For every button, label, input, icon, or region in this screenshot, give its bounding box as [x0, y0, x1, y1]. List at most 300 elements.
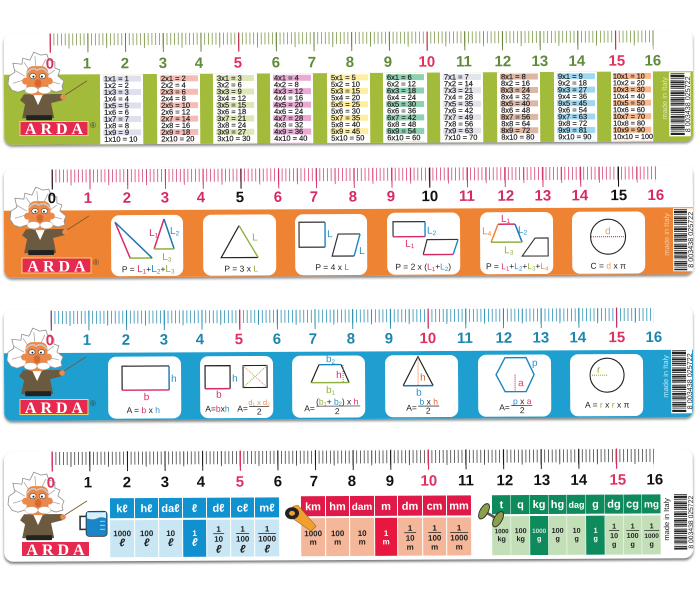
table: 3 times: 3x3 = 9 [217, 87, 242, 96]
table: 6 times: 6x8 = 48 [387, 120, 416, 129]
ruler 4 numbers [47, 471, 663, 492]
barcode [671, 349, 694, 413]
table: 8 times: 8x2 = 16 [501, 79, 530, 88]
ruler 4 numbers: 2 [123, 474, 131, 491]
table: length units: 100 [331, 529, 345, 538]
card: circle area: r [597, 365, 601, 376]
card: trapezoid area: (b [316, 397, 324, 407]
table: length units: 1 [457, 523, 462, 532]
ruler 4 numbers: 8 [348, 473, 356, 490]
ruler 1 numbers: 16 [644, 52, 661, 69]
ruler 1 numbers: 11 [456, 53, 472, 70]
card: trapezoid perimeter: + [509, 261, 514, 271]
card: equilateral triangle perimeter: P = 3 x L [224, 263, 258, 274]
card: trapezoid perimeter: L [518, 225, 524, 236]
ruler 3 numbers: 15 [608, 329, 625, 346]
ruler 3 numbers: 0 [46, 332, 54, 349]
card: rectangle and parallelogram perimeter: 1 [411, 243, 415, 250]
table: 2 times: 2x9 = 18 [161, 128, 190, 137]
table: capacity units: ℓ [168, 537, 174, 549]
card: rectangle and parallelogram perimeter: 2 [433, 230, 437, 237]
card: rectangle and parallelogram perimeter: L [405, 239, 411, 250]
card: square and rhombus area: h [232, 374, 238, 385]
table: capacity units: ℓ [264, 543, 270, 555]
ruler 1 numbers: 0 [46, 56, 54, 73]
card: square and rhombus area: b [216, 390, 222, 401]
table: length units: m [310, 538, 317, 547]
card: trapezoid perimeter: L [501, 214, 507, 225]
table: mass units: g [555, 534, 560, 543]
card: scalene triangle perimeter: L [149, 228, 155, 239]
table: 7 times: 7x8 = 56 [444, 119, 473, 129]
table: 4 times: 4x8 = 32 [274, 120, 303, 129]
card: trapezoid area: b [326, 385, 332, 396]
table: mass units: 1 [650, 521, 654, 530]
card: square and rhombus area: d₁ x d₂ [248, 398, 270, 407]
table: mass units: kg [533, 499, 545, 511]
card: scalene triangle perimeter: + [160, 264, 165, 274]
card: trapezoid area: 1 [324, 402, 327, 408]
table: 3 times [213, 73, 257, 144]
ruler 2 numbers: 13 [534, 187, 551, 205]
ruler 3 numbers: 4 [196, 331, 205, 348]
table: 10 times [611, 71, 653, 142]
ruler 1 numbers: 8 [346, 54, 354, 71]
card: triangle area [385, 355, 458, 417]
ruler 3 numbers: 8 [347, 330, 355, 348]
card: trapezoid perimeter: L [527, 261, 532, 271]
ruler 2 numbers: 12 [497, 188, 514, 205]
ruler 4 numbers: 4 [197, 474, 206, 491]
card: trapezoid perimeter: 1 [507, 218, 511, 225]
table: 8 times [497, 72, 540, 142]
card: scalene triangle perimeter: 2 [157, 268, 161, 276]
card: triangle area: b x h [419, 397, 438, 407]
made in Italy note: made in Italy [662, 498, 671, 541]
table: capacity units: hℓ [140, 503, 153, 515]
card: rectangle and parallelogram perimeter: 1 [432, 267, 436, 273]
table: 6 times: 6x3 = 18 [387, 86, 416, 95]
table: mass units: g [592, 499, 599, 511]
table: mass units: kg [516, 534, 525, 543]
card: trapezoid area: 2 [332, 360, 336, 366]
table: 7 times: 7x1 = 7 [444, 72, 469, 82]
table: mass units: dg [607, 499, 621, 511]
ruler 2 numbers: 1 [84, 190, 92, 207]
table: mass units: 10 [610, 531, 618, 540]
table: 10 times: 10x2 = 20 [613, 78, 645, 87]
table: mass units: 1000 [644, 533, 659, 540]
ruler 1 numbers: 15 [608, 53, 625, 70]
table: 9 times: 9x10 = 90 [558, 132, 591, 141]
ruler 4 numbers: 13 [533, 472, 550, 489]
table: length units: 1 [432, 524, 437, 533]
table: length units: 10 [406, 534, 415, 543]
table: 3 times: 3x10 = 30 [217, 134, 250, 143]
table: 5 times: 5x10 = 50 [331, 133, 364, 143]
table: 9 times: 9x2 = 18 [558, 78, 587, 88]
card: scalene triangle perimeter: P = L [122, 264, 143, 275]
table: 9 times: 9x7 = 63 [558, 112, 587, 121]
table: length units: m [359, 537, 366, 546]
table: 2 times: 2x3 = 6 [161, 87, 186, 96]
table: 7 times: 7x6 = 42 [444, 106, 473, 115]
ruler 1 numbers: 10 [418, 54, 435, 71]
table: capacity units: ℓ [119, 537, 125, 549]
ruler 3 numbers: 12 [495, 330, 512, 347]
table: capacity units: 1000 [258, 534, 277, 543]
table: 5 times: 5x9 = 45 [331, 127, 360, 136]
ruler 1 numbers: 6 [272, 54, 280, 71]
card: trapezoid perimeter: 3 [510, 250, 514, 257]
table: 3 times: 3x4 = 12 [217, 94, 246, 103]
table: mass units: 1 [594, 526, 598, 535]
table: 6 times: 6x7 = 42 [387, 113, 416, 122]
table: 4 times: 4x9 = 36 [274, 127, 303, 136]
card: circle circumference: C = d x π [591, 261, 626, 271]
ruler 2 numbers [48, 187, 664, 207]
ruler 3 numbers: 2 [122, 332, 130, 349]
ruler 1 numbers [46, 52, 661, 73]
card: trapezoid area: b [326, 354, 332, 365]
table: mass units: 1000 [532, 528, 547, 535]
table: 2 times: 2x10 = 20 [161, 134, 194, 143]
table: mass units: 100 [515, 526, 527, 535]
card: equilateral triangle perimeter [203, 214, 276, 276]
card: rectangle area: h [171, 374, 177, 385]
card: trapezoid perimeter: 1 [506, 267, 510, 273]
card: circle circumference [572, 211, 645, 274]
table: 9 times: 9x5 = 45 [558, 99, 587, 108]
table: 2 times: 2x2 = 4 [161, 81, 186, 90]
card: trapezoid area [292, 354, 365, 418]
table: length units: m [431, 543, 438, 552]
ruler 4 numbers: 14 [570, 472, 588, 489]
table: 7 times: 7x7 = 49 [444, 113, 473, 122]
table: 10 times: 10x7 = 70 [613, 112, 645, 121]
card: rectangle and parallelogram perimeter: 2 [445, 267, 449, 273]
table: mass units: dag [568, 500, 585, 510]
table: 5 times: 5x1 = 5 [331, 73, 356, 82]
table: capacity units: 1 [265, 524, 270, 533]
card: triangle area: b [416, 388, 422, 399]
table: length units: km [305, 501, 321, 513]
table: mass units: t [500, 499, 504, 511]
table: 2 times: 2x8 = 16 [161, 121, 190, 130]
card: triangle area: 2 [426, 406, 431, 416]
table: 6 times: 6x2 = 12 [387, 79, 416, 89]
table: 1 times: 1x4 = 4 [104, 94, 129, 103]
logo 1: ® [90, 121, 96, 130]
ruler 3 numbers: 13 [532, 329, 549, 347]
card: trapezoid perimeter: 3 [532, 267, 536, 273]
barcode [673, 208, 695, 271]
table: 1 times: 1x6 = 6 [104, 108, 129, 117]
card: triangle area: A= [406, 403, 417, 413]
table: mass units: hg [551, 499, 564, 511]
table: 1 times: 1x9 = 9 [104, 128, 129, 137]
ruler 2 numbers: 14 [571, 187, 589, 204]
table: 3 times: 3x7 = 21 [217, 114, 246, 123]
icon: dumbbell [476, 502, 506, 529]
table: 10 times: 10x10 = 100 [613, 132, 653, 141]
card: square and rhombus area [200, 356, 273, 418]
table: 3 times: 3x2 = 6 [217, 80, 242, 89]
card: trapezoid area: h [336, 370, 342, 381]
card: trapezoid perimeter: + [535, 261, 540, 271]
table: 8 times: 8x10 = 80 [501, 133, 534, 142]
table: 1 times [100, 74, 143, 144]
table: 9 times: 9x3 = 27 [558, 85, 587, 94]
table: 5 times: 5x8 = 40 [331, 120, 360, 129]
table: length units: 1 [408, 524, 413, 533]
mascot 1 [8, 52, 87, 120]
table: 9 times: 9x8 = 72 [558, 119, 587, 128]
card: scalene triangle perimeter: 2 [176, 230, 180, 237]
table: 1 times: 1x5 = 5 [104, 101, 129, 110]
table: length units: 10 [358, 529, 367, 538]
table: capacity units: ℓ [216, 544, 222, 556]
logo 3: ® [90, 399, 96, 408]
table: capacity units [110, 497, 279, 557]
card: trapezoid perimeter: 2 [519, 267, 523, 273]
ruler 4 numbers: 10 [420, 473, 437, 490]
table: 8 times: 8x9 = 72 [501, 126, 530, 135]
table: 2 times: 2x1 = 2 [161, 74, 186, 83]
ruler 4 numbers: 7 [310, 473, 318, 490]
card: trapezoid area: ) x [342, 396, 354, 407]
card: rectangle and parallelogram perimeter: L [440, 262, 445, 272]
table: capacity units: kℓ [116, 503, 128, 515]
table: 9 times: 9x6 = 54 [558, 105, 587, 115]
table: 6 times: 6x9 = 54 [387, 126, 416, 136]
ruler 3 numbers: 16 [645, 329, 662, 346]
ruler 2 numbers: 5 [236, 189, 244, 206]
table: 7 times [440, 72, 483, 143]
ruler 4 numbers: 6 [274, 473, 282, 490]
card: circle area: A = r x r x π [585, 400, 630, 410]
card: trapezoid perimeter: 4 [488, 231, 492, 238]
card: hexagon area: p [532, 358, 538, 369]
card: trapezoid perimeter: L [504, 245, 510, 256]
table: capacity units: 100 [236, 535, 250, 544]
table: 7 times: 7x3 = 21 [444, 86, 473, 95]
card: trapezoid area: + [327, 397, 334, 407]
mascot 2 [10, 187, 89, 255]
card: trapezoid perimeter: P = L [486, 261, 506, 271]
ruler 4 numbers: 9 [386, 473, 394, 490]
card: rectangle and parallelogram perimeter: L [427, 226, 433, 237]
table: 1 times: 1x3 = 3 [104, 88, 129, 97]
table: mass units: 1000 [495, 528, 509, 535]
card: scalene triangle perimeter [111, 215, 183, 276]
ruler 3 numbers: 9 [385, 330, 393, 347]
made in Italy note: made in Italy [662, 213, 671, 256]
ruler 1 numbers: 1 [83, 55, 91, 72]
table: capacity units: 1 [192, 529, 197, 538]
table: mass units: g [593, 534, 598, 543]
table: 6 times [383, 73, 427, 143]
card: rectangle area [108, 356, 181, 419]
table: mass units: 1 [612, 522, 616, 531]
table: mass units: 10 [573, 526, 581, 535]
ruler 4: unit conversion tables [4, 448, 695, 564]
ruler 1: times tables [4, 30, 693, 147]
card: square and rhombus perimeter [295, 214, 367, 275]
ruler 2: perimeter formulas [4, 165, 695, 280]
table: mass units: g [630, 540, 635, 549]
card: scalene triangle perimeter: L [165, 264, 171, 275]
table: 4 times: 4x7 = 28 [274, 114, 303, 123]
table: 3 times: 3x8 = 24 [217, 121, 246, 130]
table: 4 times: 4x10 = 40 [274, 134, 307, 143]
ruler 2 numbers: 15 [610, 187, 627, 204]
card: square and rhombus area: A= [237, 404, 248, 414]
card: trapezoid perimeter [480, 212, 553, 274]
card: circle circumference: d [605, 226, 611, 237]
table: capacity units: dℓ [212, 503, 225, 515]
card: square and rhombus perimeter: L [359, 246, 365, 257]
table: capacity units: 10 [166, 529, 176, 538]
card: scalene triangle perimeter: 3 [171, 268, 175, 275]
table: 9 times: 9x4 = 36 [558, 92, 587, 101]
table: length units: cm [427, 501, 443, 513]
table: capacity units: ℓ [192, 537, 198, 549]
table: 5 times [327, 73, 370, 143]
table: 7 times: 7x9 = 63 [444, 126, 473, 135]
table: length units: mm [449, 500, 469, 512]
table: 6 times: 6x5 = 30 [387, 100, 416, 109]
card: equilateral triangle perimeter: L [252, 232, 258, 244]
ruler 3 numbers: 6 [273, 331, 281, 348]
barcode: 8 003438 025722 [683, 76, 692, 132]
table: capacity units: 1 [216, 525, 221, 534]
table: 6 times: 6x10 = 60 [387, 133, 420, 142]
table: length units: dam [352, 502, 372, 513]
table: 5 times: 5x2 = 10 [331, 80, 360, 89]
table: 6 times: 6x6 = 36 [387, 106, 416, 115]
table: mass units: 100 [627, 531, 639, 540]
table: 7 times: 7x2 = 14 [444, 79, 473, 88]
barcode: 8 003438 025722 [688, 496, 695, 549]
ruler 1 numbers: 4 [195, 55, 204, 72]
card: trapezoid area: 2 [335, 406, 340, 416]
table: 2 times: 2x5 = 10 [161, 101, 190, 110]
card: hexagon area [478, 354, 551, 417]
table: 4 times: 4x3 = 12 [274, 87, 303, 96]
table: 1 times: 1x7 = 7 [104, 114, 129, 124]
ruler 3 numbers: 3 [160, 331, 168, 348]
table: capacity units: ℓ [240, 544, 246, 556]
card: hexagon area: p x a [513, 396, 532, 406]
card: trapezoid area: 1 [332, 391, 336, 397]
ruler 4 numbers: 16 [646, 471, 663, 488]
ruler 3 numbers [46, 329, 662, 349]
ruler 4 numbers: 15 [609, 472, 626, 489]
table: 10 times: 10x6 = 60 [613, 105, 645, 114]
card: square and rhombus area: A=bxh [205, 404, 230, 414]
card: rectangle and parallelogram perimeter: P = 2 x (L [395, 262, 432, 272]
table: 3 times: 3x1 = 3 [217, 74, 242, 83]
ruler 4 numbers: 1 [84, 474, 92, 491]
card: trapezoid perimeter: 2 [524, 230, 528, 237]
card: rectangle and parallelogram perimeter [387, 212, 460, 275]
ruler 3 numbers: 14 [569, 329, 587, 346]
mascot 4 [8, 472, 87, 540]
table: 9 times [554, 72, 597, 142]
made in Italy note: made in Italy [660, 77, 669, 120]
card: trapezoid perimeter: L [514, 261, 519, 271]
card: square and rhombus area: 2 [257, 406, 262, 416]
table: 3 times: 3x9 = 27 [217, 127, 246, 136]
ruler 1 numbers: 9 [384, 54, 392, 71]
table: 2 times: 2x7 = 14 [161, 114, 190, 123]
made in Italy note: made in Italy [661, 355, 670, 398]
ruler 3 numbers: 1 [83, 332, 91, 349]
card: trapezoid perimeter: + [522, 261, 527, 271]
ruler 4 numbers: 0 [47, 475, 55, 492]
table: 3 times: 3x5 = 15 [217, 100, 246, 110]
card: hexagon area: a [518, 378, 524, 389]
table: length units: 100 [428, 534, 442, 543]
logo 4: ARDA [26, 542, 89, 559]
table: 10 times: 10x4 = 40 [613, 92, 645, 101]
table: mass units: g [612, 540, 616, 549]
card: trapezoid perimeter: L [482, 226, 488, 237]
table: 8 times: 8x7 = 56 [501, 112, 530, 122]
table: 8 times: 8x1 = 8 [501, 72, 526, 81]
table: 10 times: 10x9 = 90 [613, 125, 645, 134]
ruler 1 numbers: 2 [121, 55, 129, 72]
table: 10 times: 10x3 = 30 [613, 85, 645, 94]
table: length units: m [407, 543, 414, 552]
card: trapezoid perimeter: 4 [545, 266, 549, 272]
table: 10 times: 10x5 = 50 [613, 98, 645, 108]
icon: tape measure [285, 505, 316, 531]
ruler 2 numbers: 2 [123, 190, 131, 207]
card: scalene triangle perimeter: L [170, 226, 176, 237]
table: length units [301, 495, 471, 556]
table: capacity units: 1000 [113, 529, 132, 538]
logo 1: ARDA [25, 121, 87, 138]
logo 2: ® [93, 258, 99, 267]
card: trapezoid area: A= [304, 403, 315, 413]
card: rectangle area: A = b x h [127, 405, 160, 415]
barcode [673, 493, 695, 551]
table: length units: 1000 [450, 533, 469, 542]
table: 1 times: 1x10 = 10 [104, 135, 137, 144]
table: mass units: g [574, 534, 579, 543]
mascot 3 [7, 328, 86, 396]
table: length units: m [381, 501, 391, 513]
card: rectangle and parallelogram perimeter: + [435, 262, 440, 272]
table: 8 times: 8x6 = 48 [501, 106, 530, 115]
ruler 3 numbers: 11 [457, 330, 473, 347]
table: capacity units: ℓ [144, 537, 150, 549]
card: hexagon area: 2 [520, 405, 525, 415]
table: 4 times: 4x1 = 4 [274, 73, 299, 82]
card: square and rhombus perimeter: P = 4 x L [315, 262, 349, 272]
ruler 3 numbers: 10 [419, 330, 436, 347]
table: 8 times: 8x5 = 40 [501, 99, 530, 108]
table: 5 times: 5x6 = 30 [331, 107, 360, 116]
barcode [669, 72, 692, 136]
table: 2 times: 2x4 = 8 [161, 94, 186, 103]
table: 4 times: 4x6 = 24 [274, 107, 303, 116]
card: trapezoid area: b [334, 397, 339, 407]
card: triangle area: h [420, 373, 426, 384]
table: mass units: q [517, 499, 524, 511]
